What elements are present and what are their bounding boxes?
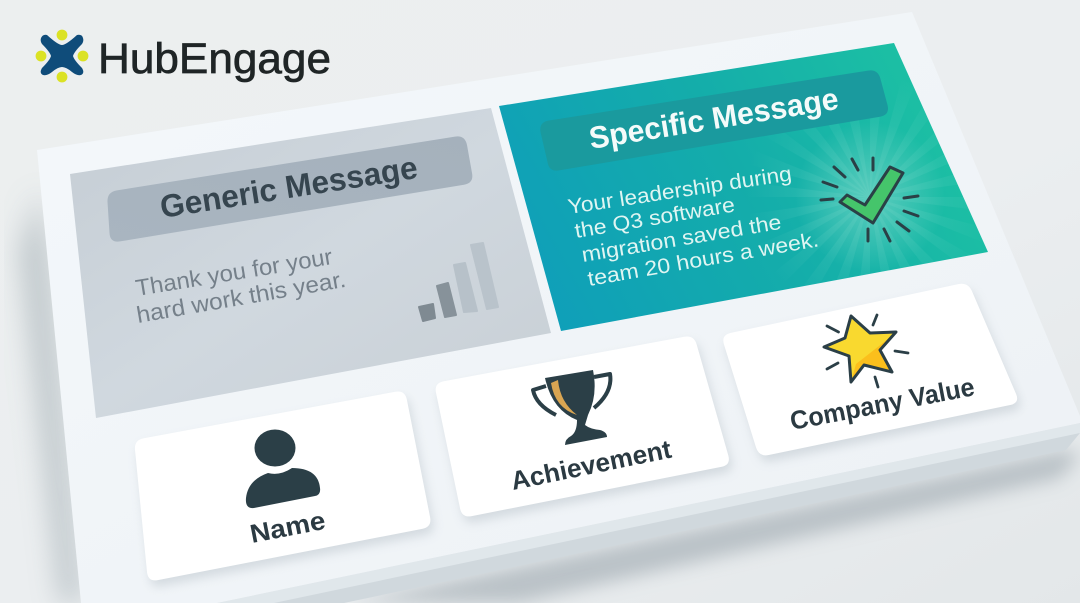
generic body text: hard work this year.: [134, 266, 348, 328]
label: name: Name: [247, 505, 328, 549]
specific panel background: [499, 43, 988, 331]
label: achievement: Achievement: [508, 434, 674, 496]
card: achievement: [436, 337, 732, 522]
icon: trophy: [533, 370, 610, 445]
heading: specific message: Specific Message: [587, 81, 841, 156]
card: company value: [723, 284, 1020, 461]
sunburst behind checkmark: [795, 122, 945, 272]
board side edge: [217, 423, 1080, 603]
card: name: [135, 392, 433, 586]
specific body text: [566, 162, 820, 291]
icon: faded bar chart: [419, 243, 498, 321]
specific body text: the Q3 software: [573, 194, 737, 243]
icon: star: [824, 315, 908, 387]
specific body text: team 20 hours a week.: [586, 228, 820, 291]
heading: generic message: Generic Message: [158, 149, 420, 225]
generic body text: [134, 243, 348, 328]
panel: generic message: [70, 108, 551, 418]
label: company value: Company Value: [788, 371, 977, 436]
icon: person: [246, 430, 320, 508]
generic title bar: [107, 136, 472, 242]
panel: specific message: [499, 43, 988, 331]
logo: hubengage: [36, 30, 331, 83]
specific body text: Your leadership during: [566, 162, 793, 219]
specific title bar: [540, 70, 888, 171]
board shadow: [22, 190, 1080, 603]
icon: checkmark with ticks: [821, 158, 918, 241]
logo wordmark: HubEngage: [98, 35, 331, 83]
specific body text: migration saved the: [580, 211, 783, 267]
generic body text: Thank you for your: [134, 243, 335, 301]
generic panel background: [70, 108, 551, 418]
icon: hub mark: [36, 30, 88, 82]
